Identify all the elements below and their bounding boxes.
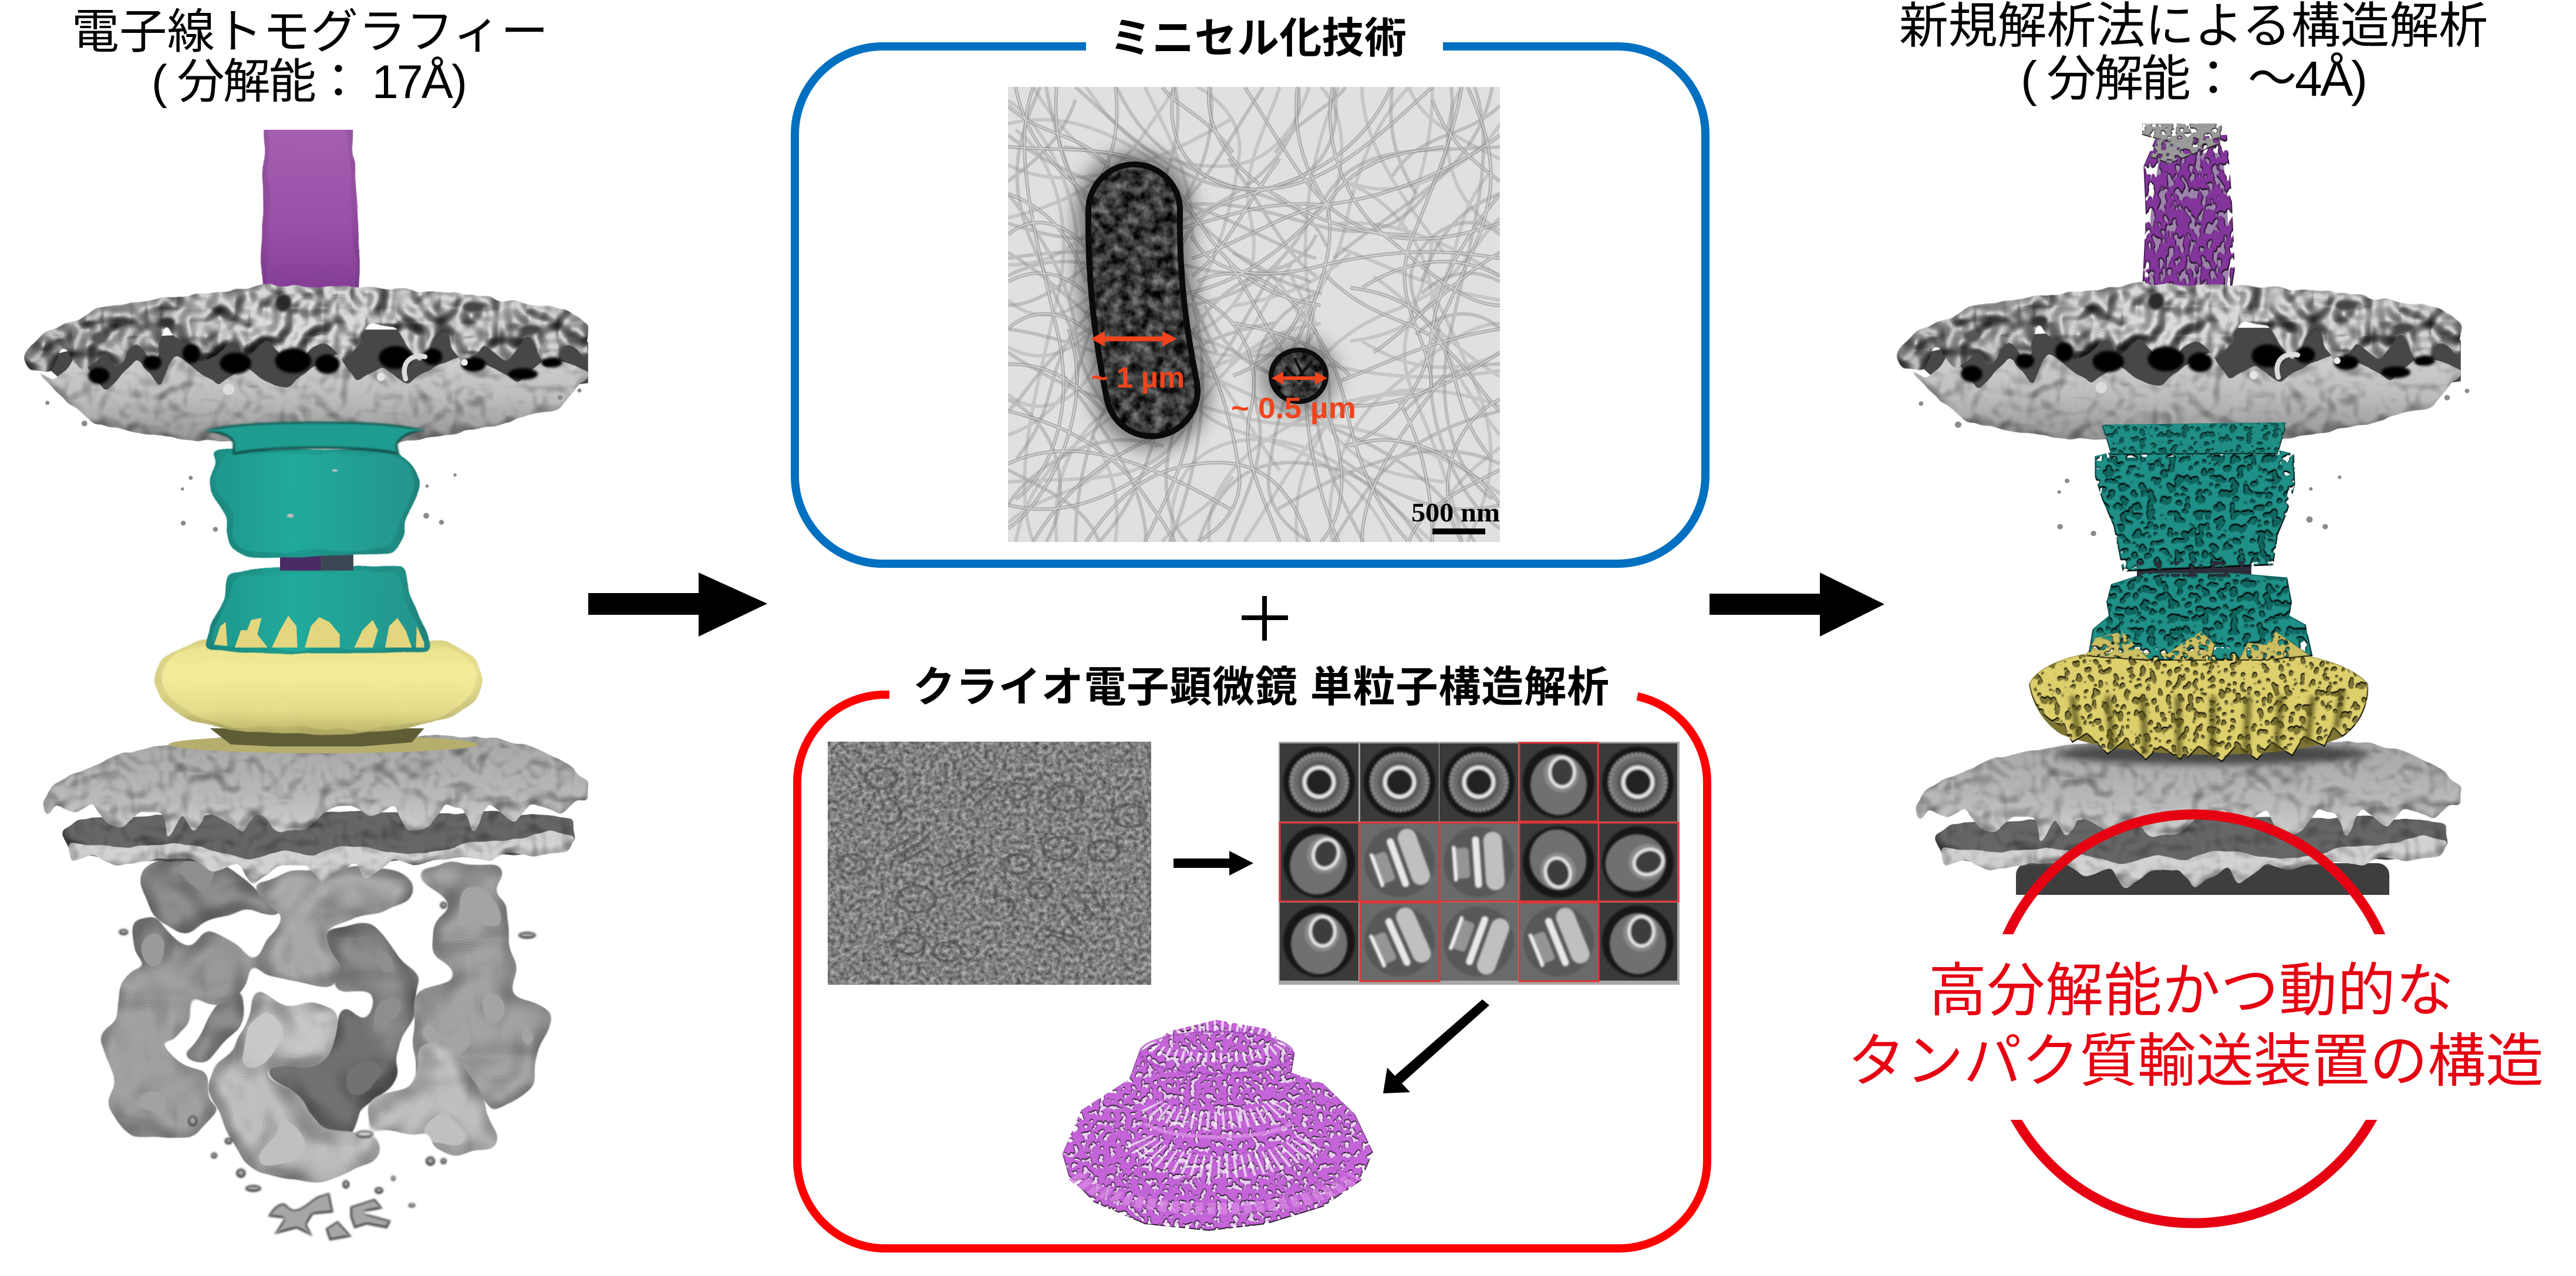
upper gray disk <box>23 287 588 443</box>
teal density <box>2086 449 2313 661</box>
purple needle <box>260 130 360 288</box>
label 0.5 um: ~ 0.5 µm <box>1231 392 1356 425</box>
arrow: methods to new structure <box>1710 573 1884 637</box>
scale bar label: 500 nm <box>1411 497 1500 527</box>
width arrow 1 um <box>1091 331 1177 346</box>
blue rounded frame <box>795 46 1705 564</box>
stray specks <box>1918 389 2469 536</box>
arrow: tomography to methods <box>588 573 767 637</box>
scale bar <box>1432 528 1485 534</box>
red rounded frame <box>797 695 1707 1248</box>
panel heading: クライオ電子顕微鏡 単粒子構造解析 <box>913 664 1609 711</box>
dark central neck <box>280 550 353 571</box>
panel: minicell technology <box>795 15 1705 564</box>
label 1 um: ~ 1 µm <box>1091 361 1185 394</box>
small round minicell <box>1260 338 1337 413</box>
cytoplasmic blobs mid layer <box>97 859 550 1142</box>
yellow ring with ridges <box>2029 653 2368 762</box>
flagella fibers <box>1008 87 1500 542</box>
teal collar band <box>2102 422 2287 454</box>
figure: high resolution structure <box>1896 123 2469 904</box>
electron micrograph of minicells <box>1008 87 1500 542</box>
fragments <box>119 901 536 1241</box>
title: new analysis method: ( 分解能： ～4Å) <box>2021 51 2368 106</box>
callout text: タンパク質輸送装置の構造 <box>1847 1028 2544 1093</box>
purple helix bundle <box>2142 123 2235 290</box>
panel: cryo-EM single particle analysis <box>797 664 1707 1248</box>
title: electron tomography: 電子線トモグラフィー <box>72 6 548 59</box>
upper teal flange <box>204 422 426 455</box>
callout ring <box>1990 814 2398 1223</box>
lower gray assembly <box>43 736 588 1241</box>
width arrow 0.5 um <box>1272 372 1327 385</box>
dark underlay <box>2095 454 2308 647</box>
cytoplasmic blobs back layer <box>140 859 420 1136</box>
callout text <box>1847 958 2544 1093</box>
gray speckles on top of helix <box>2142 123 2223 164</box>
upper teal tier <box>210 449 420 557</box>
3D reconstruction in pink <box>1063 1020 1373 1231</box>
figure: tomography map, low resolution <box>23 115 588 1241</box>
2D class averages <box>1279 742 1680 985</box>
title: new analysis method <box>1899 0 2488 106</box>
lower disk and dark band <box>1916 741 2461 904</box>
panel heading: ミニセル化技術 <box>1110 15 1407 62</box>
yellow patches on teal <box>2086 631 2311 661</box>
stray specks <box>45 389 582 532</box>
rod-shaped minicell <box>1134 210 1152 390</box>
callout text: 高分解能かつ動的な <box>1928 958 2454 1023</box>
upper gray disk <box>1896 285 2461 441</box>
dark neck between tiers <box>2137 561 2251 577</box>
cryo-EM micrograph <box>828 742 1151 985</box>
title: electron tomography: ( 分解能： 17Å) <box>151 56 467 109</box>
teal barrel <box>204 449 431 654</box>
lower teal tier <box>204 565 431 654</box>
yellow ring <box>153 640 484 753</box>
cytoplasmic blobs front layer <box>206 991 500 1180</box>
arrow: class averages to 3D map <box>1383 999 1489 1093</box>
arrow: micrograph to class averages <box>1174 851 1253 876</box>
plus sign <box>1242 596 1288 641</box>
yellow patches <box>214 616 424 648</box>
title: electron tomography <box>72 6 548 109</box>
